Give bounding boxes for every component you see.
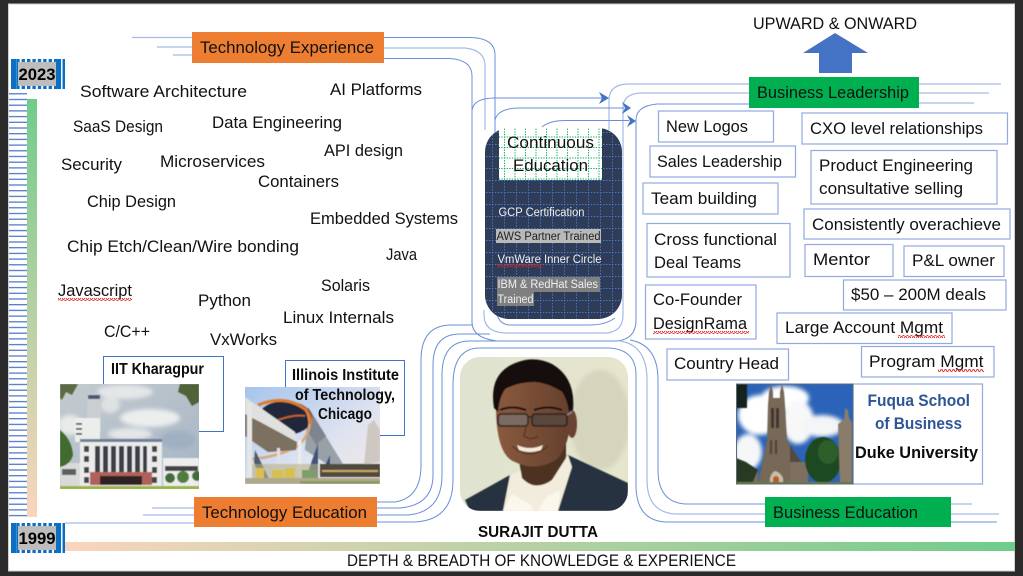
badge: 2023 bbox=[11, 59, 65, 89]
text: Illinois Institute of Technology, Chicago bbox=[292, 367, 399, 423]
large account management: Large Account Mgmt bbox=[785, 318, 943, 337]
card: IIT Kharagpur: IIT Kharagpur bbox=[111, 361, 204, 378]
P and L owner bbox=[904, 246, 1004, 276]
new logos bbox=[658, 111, 774, 142]
program management bbox=[862, 346, 994, 377]
technology skills list: SaaS Design bbox=[73, 117, 163, 136]
technology skills list: Chip Etch/Clean/Wire bonding bbox=[67, 237, 299, 256]
connector lines: business education bbox=[620, 340, 999, 522]
technology skills list: Solaris bbox=[321, 276, 370, 295]
text: Illinois Institute of Technology, Chicago: Illinois Institute bbox=[292, 367, 399, 384]
text: Illinois Institute of Technology, Chicago: of Technology, bbox=[295, 387, 395, 404]
photo frame: Duke chapel bbox=[736, 384, 853, 484]
name: Surajit Dutta: SURAJIT DUTTA bbox=[478, 524, 598, 541]
product engineering: consultative selling bbox=[819, 179, 963, 198]
arrowhead top bbox=[599, 92, 609, 104]
certification list bbox=[496, 207, 602, 306]
card: Duke Fuqua School of Business: Fuqua School bbox=[868, 391, 970, 410]
panel: continuous education bbox=[485, 128, 622, 319]
photo: portrait of Surajit Dutta bbox=[460, 357, 630, 511]
CXO relationships: CXO level relationships bbox=[810, 119, 983, 138]
cross functional: Cross functional bbox=[654, 230, 777, 249]
arrowhead middle bbox=[622, 102, 631, 114]
technology skills list: Linux Internals bbox=[283, 308, 394, 327]
mentor bbox=[805, 244, 893, 276]
technology skills list: Security bbox=[61, 155, 122, 174]
technology skills list: AI Platforms bbox=[330, 80, 422, 99]
connector lines: technology experience bbox=[132, 38, 749, 341]
text: Illinois Institute of Technology, Chicago: Chicago bbox=[318, 406, 372, 423]
consistently overachieve: Consistently overachieve bbox=[812, 215, 1001, 234]
certification list: GCP Certification bbox=[498, 207, 584, 219]
sales leadership bbox=[650, 146, 796, 177]
CXO relationships bbox=[802, 113, 1008, 144]
product engineering: Product Engineering bbox=[819, 156, 973, 175]
technology skills list: Embedded Systems bbox=[310, 209, 458, 228]
badge: 2023: 2023 bbox=[18, 66, 56, 84]
product engineering bbox=[811, 150, 997, 204]
P and L owner: P&L owner bbox=[912, 251, 995, 270]
connector lines: continuing education arrows bbox=[472, 92, 636, 127]
photo: IIT Kharagpur building bbox=[58, 384, 202, 489]
team building: Team building bbox=[651, 189, 757, 208]
connector lines: technology education bbox=[65, 325, 765, 523]
new logos: New Logos bbox=[666, 117, 748, 136]
cross functional: Deal Teams bbox=[654, 253, 741, 272]
heading: business leadership bbox=[749, 77, 919, 108]
badge: 1999 bbox=[11, 523, 65, 553]
card: Illinois Institute of Technology bbox=[286, 360, 404, 436]
arrowhead bottom bbox=[627, 115, 636, 127]
heading: technology education: Technology Education bbox=[202, 503, 367, 522]
heading: technology education bbox=[194, 497, 377, 527]
technology skills list: C/C++ bbox=[104, 322, 150, 341]
heading: business education bbox=[765, 497, 951, 527]
technology skills list bbox=[58, 80, 458, 349]
deal size bbox=[844, 280, 1006, 310]
technology skills list: API design bbox=[324, 141, 403, 160]
team building bbox=[643, 183, 778, 214]
sales leadership: Sales Leadership bbox=[657, 152, 782, 171]
heading: technology experience bbox=[192, 32, 384, 63]
certification list: VmWare Inner Circle bbox=[498, 254, 602, 266]
card: Duke Fuqua School of Business bbox=[853, 384, 982, 484]
technology skills list: Software Architecture bbox=[80, 82, 247, 101]
technology skills list: Java bbox=[386, 245, 417, 264]
technology skills list: Microservices bbox=[160, 152, 265, 171]
photo: Duke chapel bbox=[734, 384, 853, 484]
heading: business leadership: Business Leadership bbox=[757, 83, 909, 102]
technology skills list: Data Engineering bbox=[212, 113, 342, 132]
co-founder: Co-Founder bbox=[653, 290, 742, 309]
certification list: AWS Partner Trained bbox=[496, 231, 600, 243]
technology skills list: Python bbox=[198, 291, 251, 310]
technology skills list: Chip Design bbox=[87, 192, 176, 211]
timeline: vertical gradient bar bbox=[27, 99, 37, 517]
heading: upward and onward: UPWARD & ONWARD bbox=[753, 14, 917, 33]
program management: Program Mgmt bbox=[869, 352, 984, 371]
photo: Illinois Institute of Technology station bbox=[245, 387, 380, 484]
certification list: Trained bbox=[498, 294, 534, 306]
country head: Country Head bbox=[674, 354, 779, 373]
co-founder: DesignRama bbox=[653, 314, 748, 333]
timeline: horizontal gradient bar bbox=[65, 542, 1015, 551]
co-founder bbox=[646, 285, 756, 339]
footer label: depth and breadth: DEPTH & BREADTH OF KNOWLEDGE & EXPERIENCE bbox=[347, 551, 736, 570]
card: IIT Kharagpur bbox=[104, 356, 224, 432]
continuous education title: Continuous bbox=[507, 133, 594, 152]
continuous education title: Education bbox=[513, 156, 588, 175]
arrow: up bbox=[803, 33, 868, 73]
consistently overachieve bbox=[804, 209, 1010, 239]
timeline: vertical stripes bbox=[9, 90, 27, 518]
heading: technology experience: Technology Experience bbox=[200, 38, 374, 57]
country head bbox=[667, 349, 788, 380]
heading: business education: Business Education bbox=[773, 503, 918, 522]
cross functional bbox=[647, 224, 790, 277]
continuous education title bbox=[499, 128, 602, 180]
technology skills list: Javascript bbox=[58, 281, 132, 300]
connector lines: business leadership bbox=[609, 84, 1001, 130]
badge: 1999: 1999 bbox=[18, 530, 56, 548]
mentor: Mentor bbox=[813, 250, 870, 269]
card: Duke Fuqua School of Business: Duke University bbox=[855, 443, 979, 462]
card: Duke Fuqua School of Business: of Business bbox=[875, 414, 962, 433]
technology skills list: VxWorks bbox=[210, 330, 277, 349]
business skill boxes bbox=[643, 111, 1010, 380]
technology skills list: Containers bbox=[258, 172, 339, 191]
large account management bbox=[777, 313, 952, 344]
certification list: IBM & RedHat Sales bbox=[498, 279, 598, 291]
deal size: $50 – 200M deals bbox=[851, 285, 986, 304]
